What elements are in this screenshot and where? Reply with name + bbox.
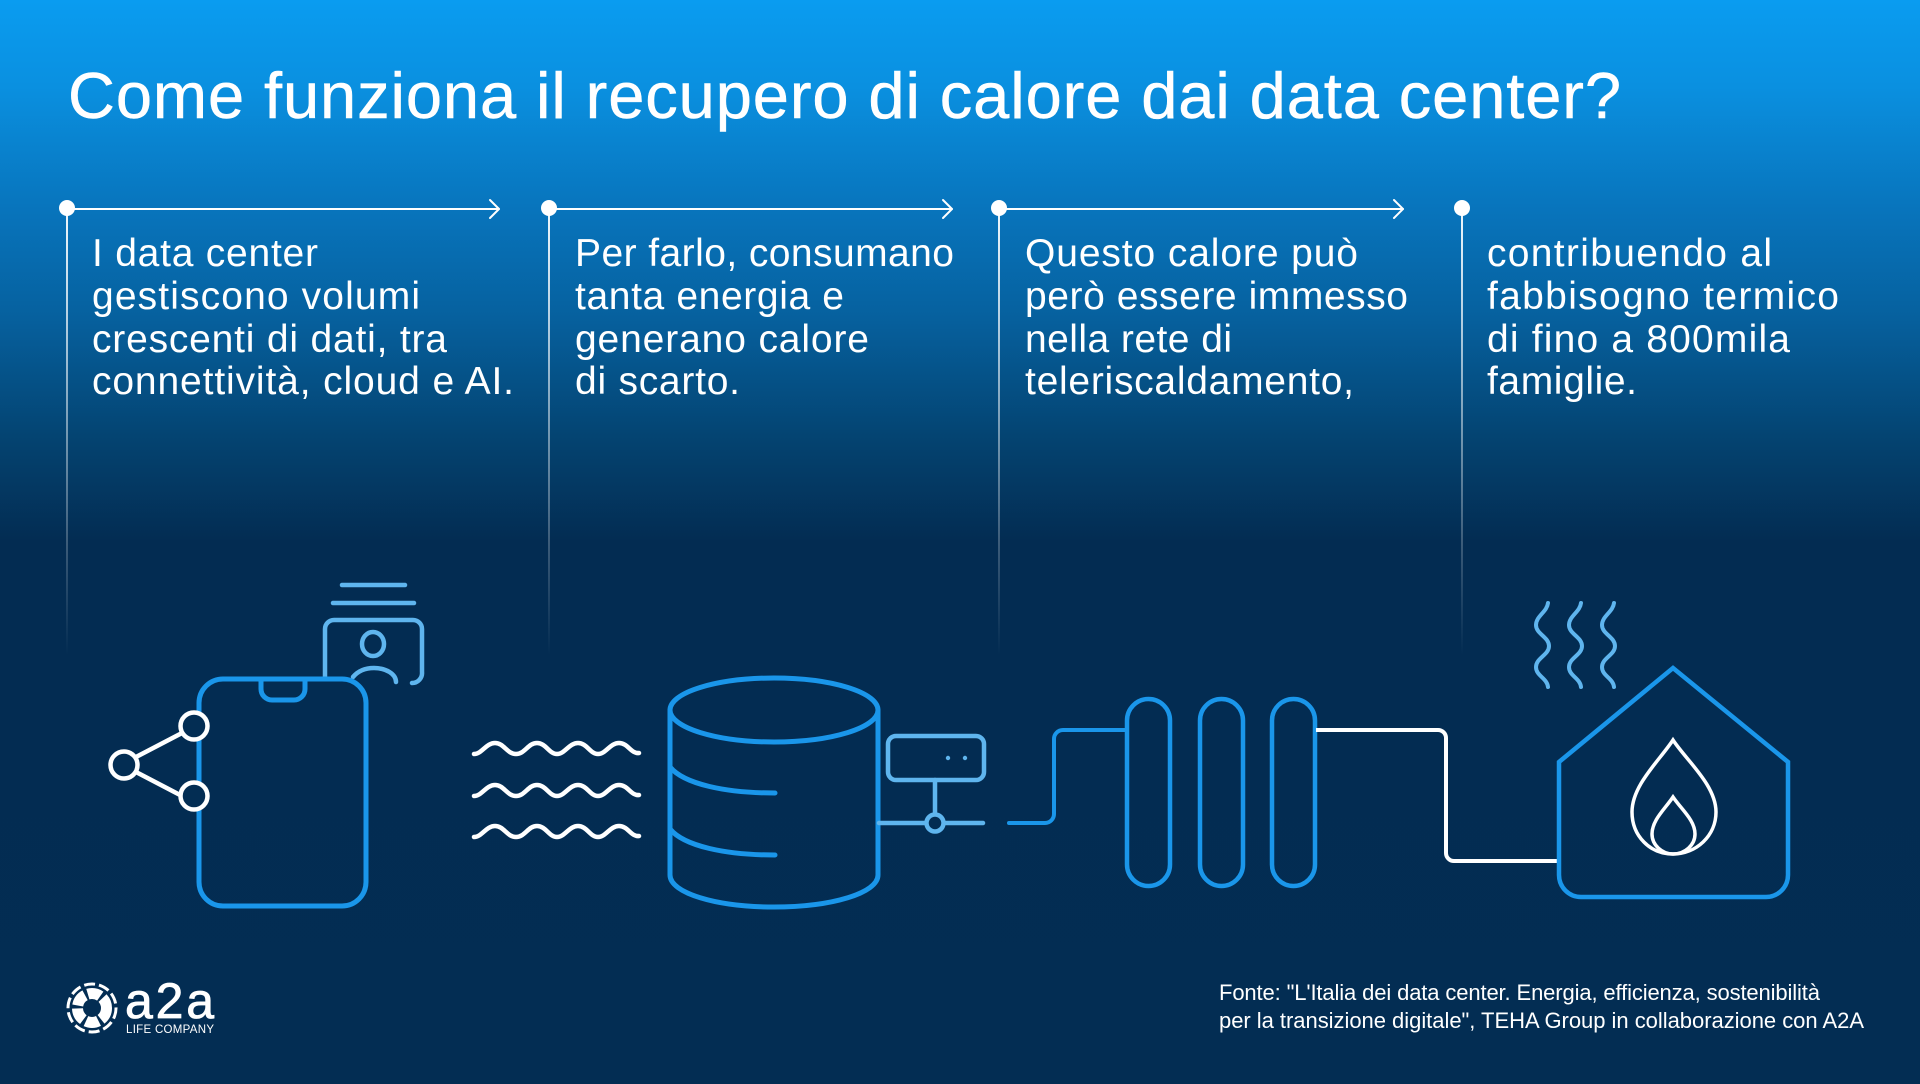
icon: share nodes — [110, 712, 208, 810]
icon: pipe to radiator — [1009, 730, 1127, 823]
logo mark — [68, 984, 116, 1032]
source note — [1219, 980, 1864, 1033]
step 3: timeline marker and arrow — [991, 200, 1403, 655]
step 2 text: Per farlo, consumano — [575, 232, 954, 275]
step 3 text — [1025, 232, 1408, 403]
icon: heat waves — [1536, 603, 1615, 687]
logo: a2a: LIFE COMPANY — [126, 1024, 214, 1036]
step 4 text: contribuendo al — [1487, 232, 1772, 275]
icon: data waves — [474, 743, 639, 837]
step 1: timeline marker and arrow — [59, 200, 499, 655]
step 1 text: I data center — [92, 232, 318, 275]
source note: Fonte: "L'Italia dei data center. Energia, efficienza, sostenibilità — [1219, 980, 1821, 1005]
step 2 text — [575, 232, 954, 403]
step 1 text — [92, 232, 514, 403]
step 3 text: Questo calore può — [1025, 232, 1358, 275]
step 4 text: fabbisogno termico — [1487, 275, 1839, 318]
icon: smartphone — [199, 679, 366, 906]
step 1 text: gestiscono volumi — [92, 275, 420, 318]
step 4 text: di fino a 800mila — [1487, 318, 1790, 361]
step 2: timeline marker and arrow — [541, 200, 952, 655]
step 3 text: nella rete di — [1025, 318, 1232, 361]
icon: profile card — [325, 585, 422, 683]
step 3 text: però essere immesso — [1025, 275, 1408, 318]
icon: flame — [1632, 740, 1716, 854]
step 3 text: teleriscaldamento, — [1025, 360, 1354, 403]
icon: house — [1559, 668, 1788, 897]
step 2 text: di scarto. — [575, 360, 740, 403]
logo: a2a — [68, 973, 214, 1036]
step 4 text: famiglie. — [1487, 360, 1637, 403]
step 4: timeline marker — [1454, 200, 1470, 655]
icon: server connector — [879, 736, 984, 832]
step 2 text: tanta energia e — [575, 275, 844, 318]
icon: database cylinder — [670, 678, 878, 907]
step 1 text: connettività, cloud e AI. — [92, 360, 514, 403]
step 4 text — [1487, 232, 1839, 403]
logo: a2a: a2a — [125, 973, 214, 1029]
step 1 text: crescenti di dati, tra — [92, 318, 447, 361]
icon: hot water pipe — [1316, 730, 1558, 861]
source note: per la transizione digitale", TEHA Group in collaborazione con A2A — [1219, 1008, 1864, 1033]
step 2 text: generano calore — [575, 318, 869, 361]
icon: radiator — [1127, 699, 1315, 886]
title: Come funziona il recupero di calore dai data center? — [68, 59, 1621, 132]
